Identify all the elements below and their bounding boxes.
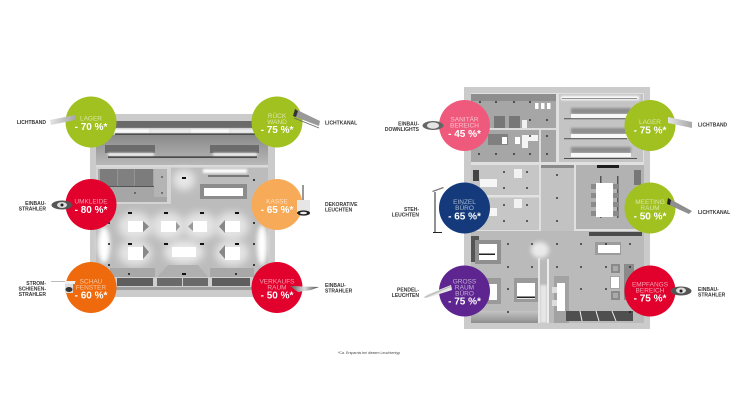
- callout: Verkaufsraum -50%: RAUM: [267, 284, 287, 292]
- label: Einbaustrahler: STRAHLER: [325, 288, 353, 294]
- callout: Schaufenster -60%: - 60 %*: [75, 290, 108, 302]
- label: Einbaustrahler: EINBAU-: [325, 283, 346, 289]
- label: Einbaustrahler: EINBAU-: [25, 201, 46, 207]
- callout: Lager -70%: [66, 96, 116, 148]
- callout: Rückwand -75%: [252, 96, 302, 148]
- icon: Einbaustrahler right of Verkaufsraum: [290, 286, 319, 292]
- callout: Einzelbüro -65%: - 65 %*: [448, 212, 481, 222]
- callout: Meetingraum -50%: MEETING: [635, 199, 665, 206]
- icon: Lichtkanal left: [293, 109, 320, 128]
- label: Einbau-Downlights: EINBAU-: [398, 122, 419, 128]
- icon: Einbaustrahler left: [52, 200, 72, 210]
- label: Einbaustrahler: STRAHLER: [19, 206, 46, 212]
- callout: Großraumbüro -75%: RAUM: [455, 284, 474, 292]
- callout: Großraumbüro -75%: - 75 %*: [448, 296, 481, 308]
- label: Lichtband: LICHTBAND: [698, 123, 728, 129]
- callout: Rückwand -75%: - 75 %*: [261, 125, 294, 136]
- label: Lichtkanal: LICHTKANAL: [325, 120, 357, 126]
- label: Pendelleuchten: PENDEL-: [397, 288, 419, 294]
- callout: Verkaufsraum -50%: - 50 %*: [261, 290, 294, 302]
- label: Dekorative Leuchten: LEUCHTEN: [325, 208, 353, 214]
- callout: Rückwand -75%: RÜCK: [268, 112, 287, 120]
- callout: Lager -70%: - 70 %*: [75, 122, 108, 133]
- icon: Stromschienenstrahler: [51, 281, 76, 293]
- label: Stromschienenstrahler: STROM-: [26, 281, 46, 287]
- callout: Empfangsbereich -75%: [624, 266, 676, 316]
- label: Einbau-Downlights: DOWNLIGHTS: [385, 127, 420, 133]
- callout: Lager -75%: [624, 100, 676, 151]
- label: Stromschienenstrahler: SCHIENEN-: [18, 286, 46, 292]
- label: Lichtkanal: LICHTKANAL: [698, 210, 730, 216]
- callout: Rückwand -75%: WAND: [267, 119, 287, 126]
- callout: Einzelbüro -65%: [439, 182, 490, 234]
- callout: Empfangsbereich -75%: BEREICH: [636, 288, 665, 294]
- callout: Großraumbüro -75%: BÜRO: [455, 290, 474, 298]
- callout: Lager -75%: LAGER: [639, 119, 661, 126]
- footnote: *Ca. Ersparnis bei diesem Leuchtentyp: [338, 351, 400, 355]
- icon: Stehleuchte: [432, 187, 444, 233]
- icon: Lichtkanal right: [667, 198, 692, 214]
- callout: Empfangsbereich -75%: - 75 %*: [634, 294, 667, 304]
- callout: Sanitärbereich -45%: BEREICH: [450, 122, 479, 130]
- callout: Sanitärbereich -45%: - 45 %*: [448, 129, 481, 140]
- callout: Großraumbüro -75%: GROSS: [453, 278, 477, 286]
- callout: Umkleide -80%: UMKLEIDE: [74, 198, 108, 206]
- label: Lichtband: LICHTBAND: [17, 120, 46, 126]
- icon: Lichtband right: [668, 117, 692, 128]
- callout: Lager -70%: LAGER: [80, 116, 102, 123]
- icon: Einbaustrahler right: [670, 286, 692, 296]
- icon: Lichtband left: [50, 115, 75, 125]
- callout: Schaufenster -60%: FENSTER: [76, 284, 106, 292]
- icon: Dekorative Leuchte: [297, 185, 310, 216]
- icon: Einbau-Downlights: [422, 121, 444, 130]
- label: Einbaustrahler: EINBAU-: [698, 287, 719, 293]
- label: Stromschienenstrahler: STRAHLER: [19, 292, 46, 298]
- callout: Umkleide -80%: [66, 179, 116, 230]
- callout: Großraumbüro -75%: [439, 266, 490, 316]
- callout: Empfangsbereich -75%: EMPFANGS: [632, 282, 669, 288]
- label: Stehleuchten: STEH-: [404, 207, 419, 213]
- callout: Sanitärbereich -45%: SANITÄR: [450, 116, 479, 124]
- label: Einbaustrahler: STRAHLER: [698, 292, 726, 298]
- label: Pendelleuchten: LEUCHTEN: [392, 293, 419, 299]
- callout: Verkaufsraum -50%: VERKAUFS: [259, 278, 295, 286]
- callout: Meetingraum -50%: RAUM: [640, 205, 660, 212]
- callout: Kasse -65%: KASSE: [266, 198, 288, 206]
- callout: Meetingraum -50%: [624, 182, 676, 234]
- callout: Kasse -65%: - 65 %*: [261, 205, 294, 216]
- label: Stehleuchten: LEUCHTEN: [392, 212, 419, 218]
- callout: Umkleide -80%: - 80 %*: [75, 205, 108, 216]
- callout: Lager -75%: - 75 %*: [634, 126, 667, 136]
- callout: Schaufenster -60%: SCHAU: [80, 278, 103, 286]
- callout: Sanitärbereich -45%: [439, 100, 490, 151]
- callout: Meetingraum -50%: - 50 %*: [634, 212, 667, 222]
- floor plan: office: [464, 87, 650, 329]
- icon: Pendelleuchte: [424, 285, 452, 298]
- callout: Schaufenster -60%: [66, 262, 116, 313]
- callout: Kasse -65%: [252, 179, 302, 230]
- callout: Verkaufsraum -50%: [252, 262, 302, 313]
- callout: Einzelbüro -65%: EINZEL: [453, 199, 476, 206]
- floor plan: shop: [90, 114, 275, 297]
- callout: Einzelbüro -65%: BÜRO: [455, 204, 474, 212]
- label: Dekorative Leuchten: DEKORATIVE: [325, 202, 358, 208]
